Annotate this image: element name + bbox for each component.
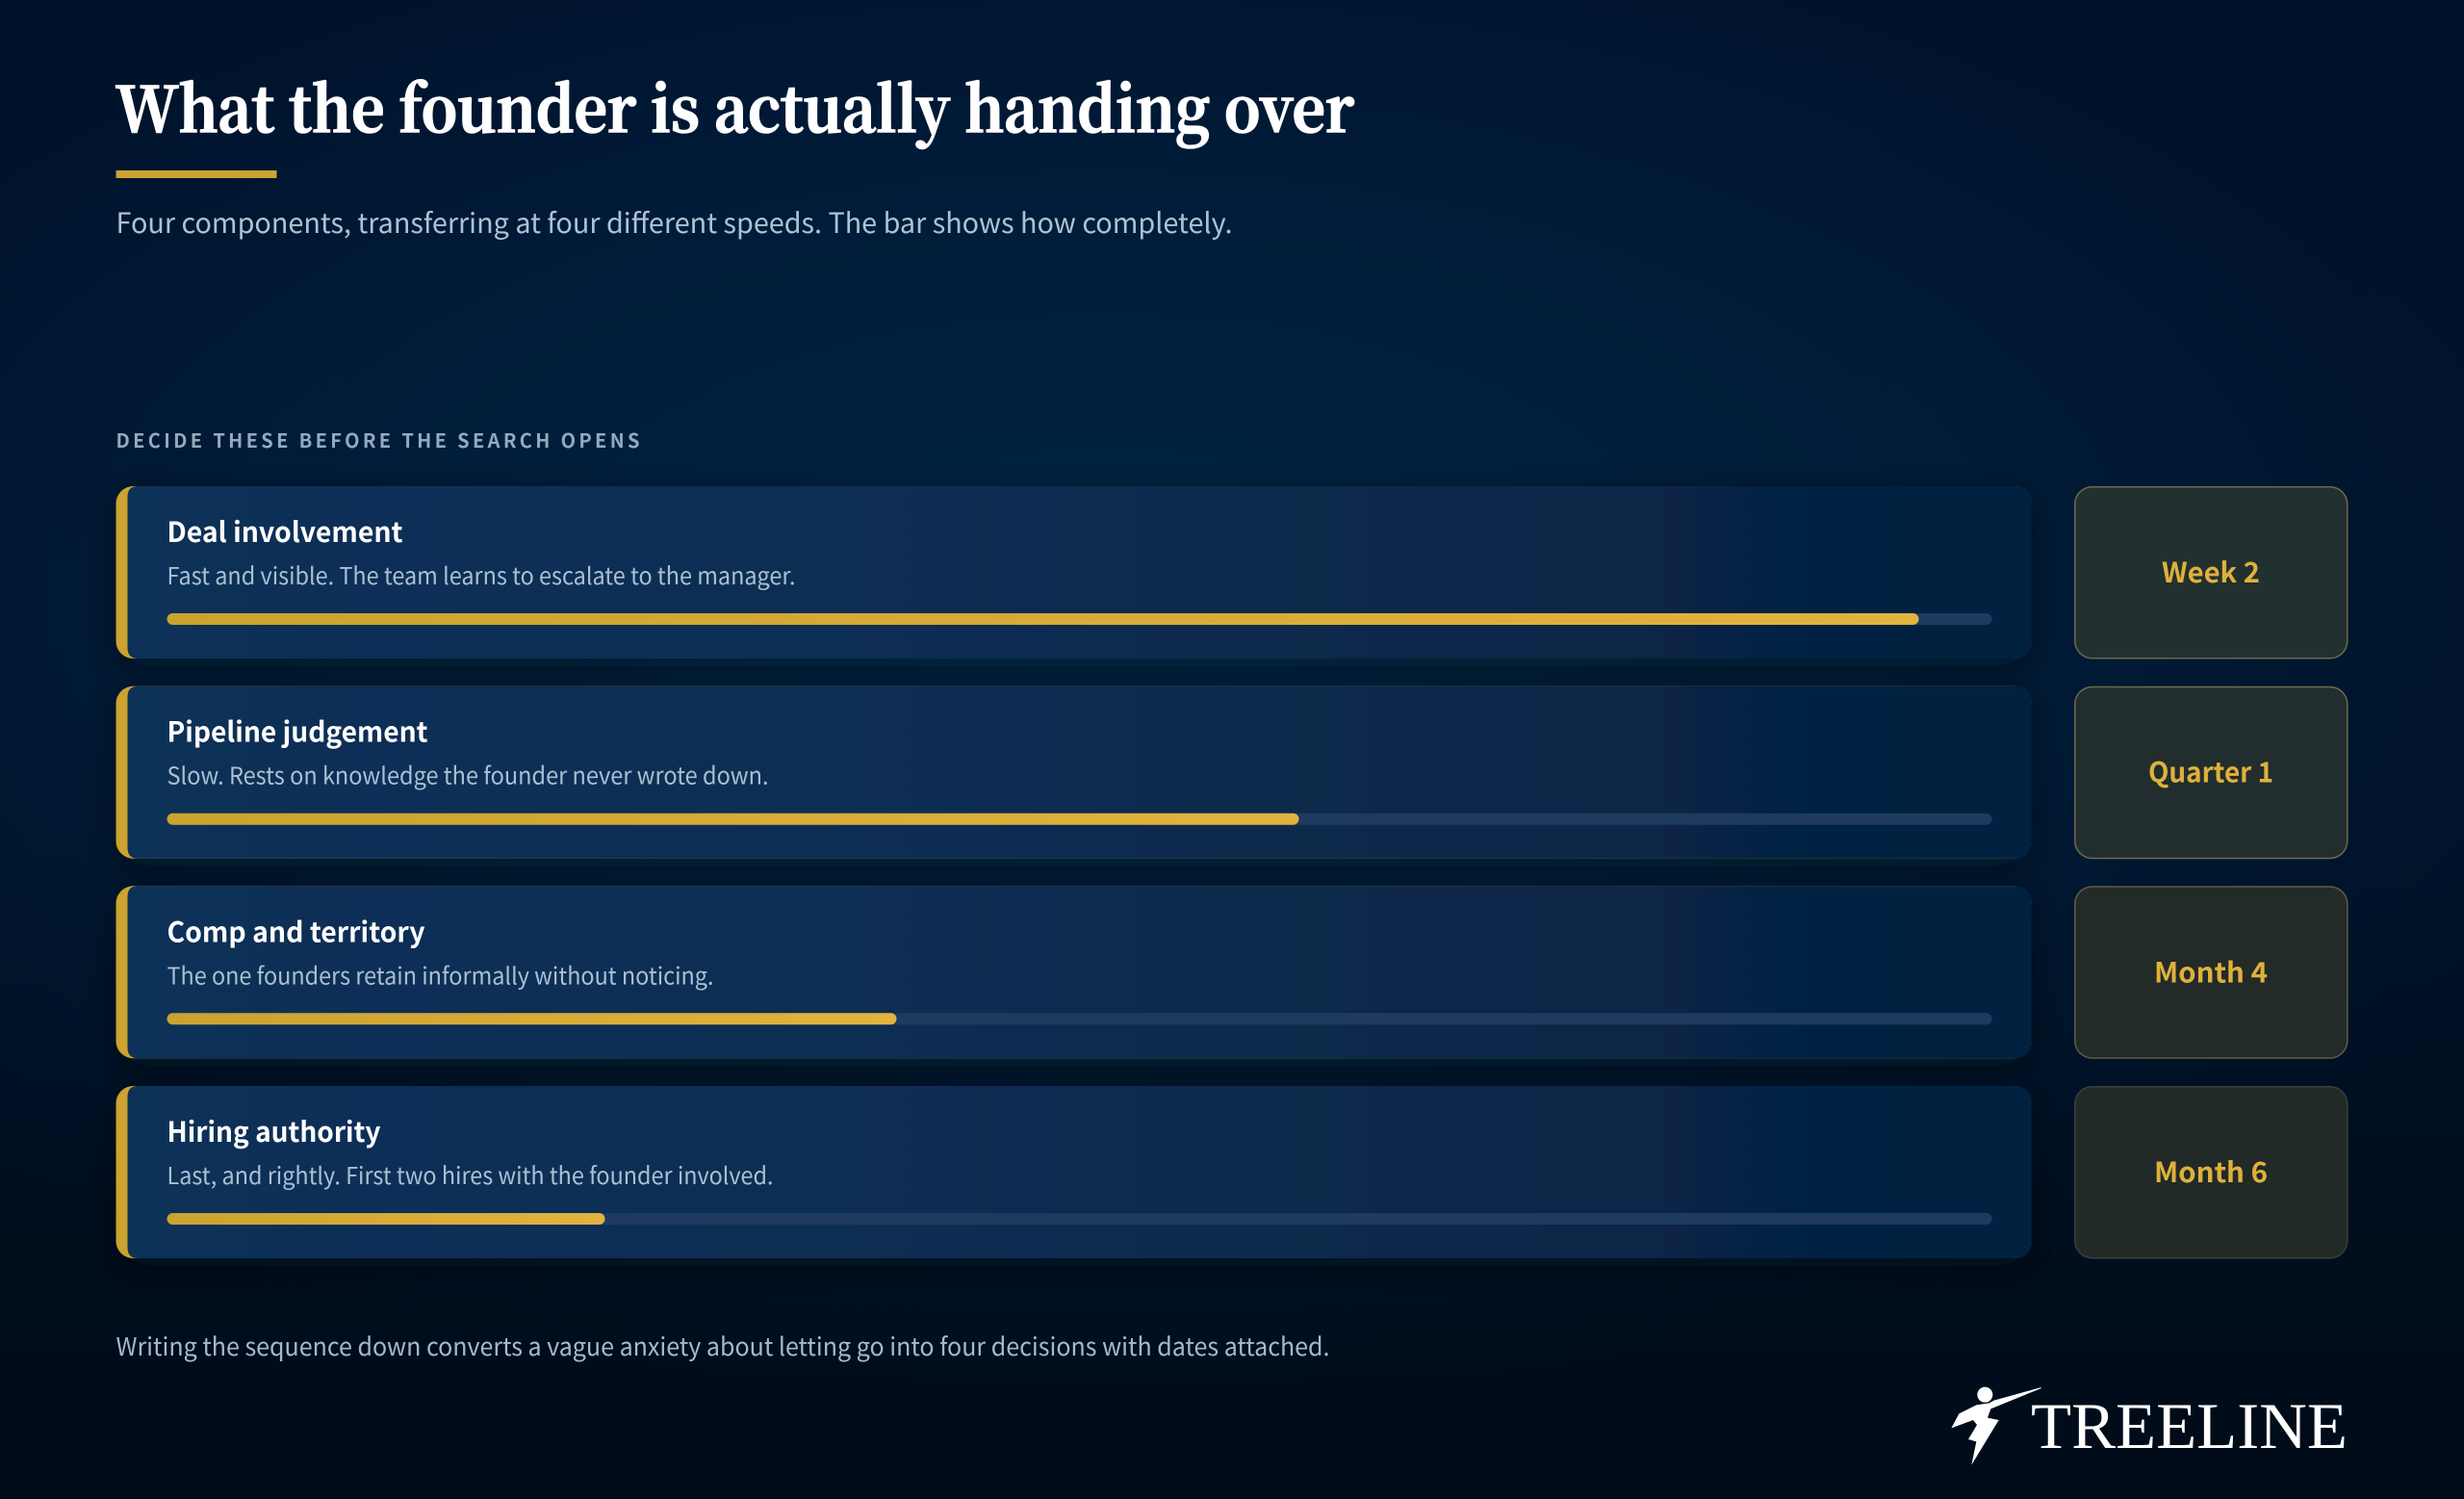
progress bar [167,1213,1992,1225]
card heading: Pipeline judgement [167,711,427,751]
panel: comp and territory [116,886,2031,1058]
badge: week 2: Week 2 [2162,551,2260,591]
card description: Fast and visible. The team learns to escalate to the manager. [167,558,795,592]
title accent rule [116,170,277,178]
progress bar [167,1013,1992,1024]
card description: Last, and rightly. First two hires with the founder involved. [167,1158,774,1192]
progress bar [167,814,1992,825]
title: What the founder is actually handing over [116,60,1354,150]
badge: month 6 [2075,1087,2348,1258]
card heading: Hiring authority [167,1110,381,1150]
section label: DECIDE THESE BEFORE THE SEARCH OPENS [116,426,640,453]
panel: hiring authority [116,1086,2031,1258]
panel: deal involvement [116,486,2031,659]
card description: The one founders retain informally without noticing. [167,958,714,992]
progress bar [167,613,1992,625]
badge: month 6: Month 6 [2154,1150,2268,1191]
panel: pipeline judgement [116,686,2031,859]
icon: leaping figure [1951,1387,2041,1465]
card heading: Deal involvement [167,510,402,551]
card background [116,1086,2031,1258]
card background [116,886,2031,1058]
wordmark: TREELINE [2031,1389,2348,1462]
card heading: Comp and territory [167,910,425,950]
card description: Slow. Rests on knowledge the founder never wrote down. [167,759,768,792]
badge: quarter 1 [2075,686,2348,858]
badge: quarter 1: Quarter 1 [2148,751,2273,791]
subtitle: Four components, transferring at four different speeds. The bar shows how completely. [116,201,1232,242]
badge: month 4: Month 4 [2154,950,2268,991]
card background [116,686,2031,859]
badge: month 4 [2075,887,2348,1058]
badge: week 2 [2075,487,2348,659]
logo: treeline [1951,1387,2348,1465]
footer note: Writing the sequence down converts a vague anxiety about letting go into four decisions with dates attached. [116,1328,1330,1363]
card background [116,486,2031,659]
